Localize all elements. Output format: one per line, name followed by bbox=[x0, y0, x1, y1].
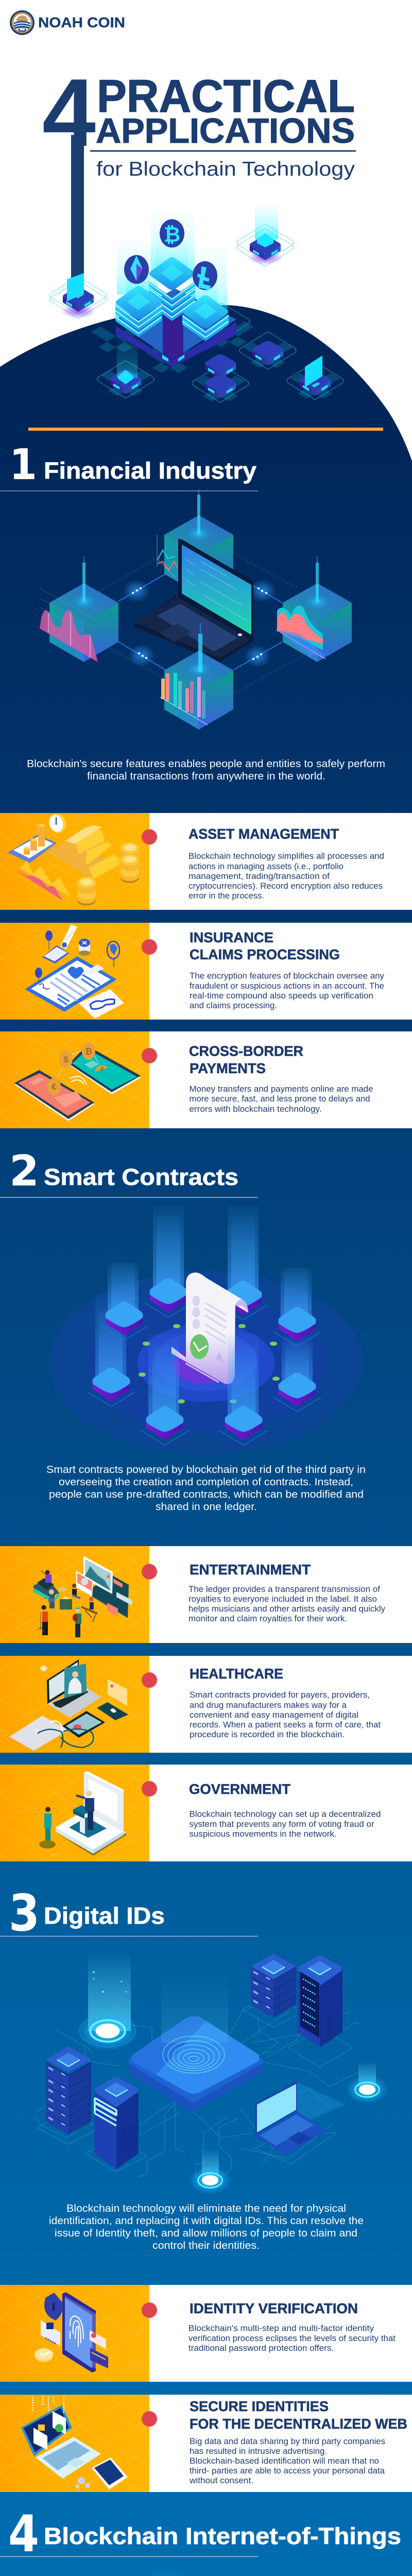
panel body text bbox=[188, 2324, 396, 2353]
panel body text bbox=[188, 852, 384, 901]
front nodes and beams bbox=[141, 1334, 267, 1445]
paragraph: smart contracts: Smart contracts powered by blockchain get rid of the third party in bbox=[46, 1464, 366, 1476]
decorative gold rule bbox=[28, 428, 383, 431]
panel heading bbox=[190, 929, 340, 962]
section heading: 3 Digital IDs: 3 bbox=[9, 1884, 40, 1943]
panel body text: convenient and easy management of digital bbox=[190, 1710, 358, 1720]
section heading: 1 Financial Industry: 1 bbox=[9, 440, 37, 489]
left cube with pink area chart bbox=[39, 556, 118, 662]
illustration: laptop with locks and phone bbox=[21, 2396, 128, 2489]
illustration: hero blockchain platform with coins and nodes bbox=[50, 204, 344, 402]
illustration: gold bars, coins, tablet chart bbox=[8, 811, 139, 906]
paragraph: digital IDs: issue of Identity theft, and allow millions of people to claim and bbox=[55, 2227, 357, 2239]
panel body text bbox=[190, 1084, 373, 1114]
panel body text: errors with blockchain technology. bbox=[190, 1105, 321, 1114]
illustration: two phones exchanging coins bbox=[14, 1042, 141, 1121]
title bbox=[42, 59, 356, 279]
panel: entertainment bbox=[0, 1546, 412, 1643]
laptop bbox=[133, 539, 253, 663]
laptop with fingerprint reader screen bbox=[255, 2081, 345, 2155]
panel: secure identities bbox=[0, 2395, 412, 2492]
panel heading: GOVERNMENT bbox=[189, 1781, 290, 1797]
section heading: 3 Digital IDs: Digital IDs bbox=[44, 1903, 165, 1929]
panel: healthcare bbox=[0, 1656, 412, 1753]
section heading: 4 Blockchain Internet-of-Things: Blockchain Internet-of-Things bbox=[44, 2523, 401, 2549]
paragraph: digital IDs: control their identities. bbox=[152, 2240, 260, 2251]
panel: asset management bbox=[0, 811, 412, 910]
panel body text bbox=[190, 1690, 381, 1739]
marker dot bbox=[142, 1672, 157, 1688]
panel body text bbox=[190, 972, 385, 1010]
marker dot bbox=[142, 2302, 157, 2318]
title: for Blockchain Technology bbox=[96, 158, 355, 180]
panel heading: CROSS-BORDER bbox=[189, 1043, 303, 1059]
panel heading: INSURANCE bbox=[190, 929, 273, 945]
panel body text: actions in managing assets (i.e., portfolio bbox=[188, 862, 344, 871]
panel heading: PAYMENTS bbox=[190, 1060, 266, 1076]
panel body text: helps musicians and other artists easily and quickly bbox=[188, 1604, 386, 1614]
top cube with line chart bbox=[157, 489, 233, 594]
paragraph: smart contracts: shared in one ledger. bbox=[156, 1501, 257, 1513]
contract document bbox=[171, 1273, 248, 1384]
panel body text: Blockchain technology can set up a decentralized bbox=[190, 1809, 381, 1819]
paragraph: digital IDs: Blockchain technology will eliminate the need for physical bbox=[66, 2202, 346, 2214]
illustration: fingerprint chip, servers, laptop bbox=[36, 1951, 388, 2194]
panel: government bbox=[0, 1765, 412, 1861]
marker dot bbox=[142, 2411, 157, 2427]
panel body text: The ledger provides a transparent transmission of bbox=[188, 1585, 380, 1594]
marker dot bbox=[142, 1781, 157, 1797]
panel body text: Blockchain's multi-step and multi-factor identity bbox=[188, 2324, 374, 2333]
server racks back bbox=[251, 1954, 342, 2047]
panel body text: fraudulent or suspicious actions in an account. The bbox=[190, 981, 384, 991]
right cube with pink and teal area chart bbox=[276, 556, 352, 662]
illustration: two phones exchanging coins: ₿ bbox=[85, 1046, 92, 1056]
title: APPLICATIONS bbox=[96, 111, 355, 150]
panel body text: more secure, fast, and less prone to delays and bbox=[190, 1094, 370, 1104]
coin stacks bbox=[115, 257, 229, 341]
logo: Noah Coin header: NOAH COIN bbox=[38, 14, 125, 30]
section heading: 2 Smart Contracts: 2 bbox=[9, 1147, 39, 1196]
panel body text: cryptocurrencies). Record encryption also reduces bbox=[188, 882, 383, 891]
green link dots bbox=[139, 1324, 280, 1403]
panel body text: Blockchain technology simplifies all processes and bbox=[188, 852, 384, 861]
panel body text: has resulted in intrusive advertising. bbox=[190, 2447, 327, 2456]
panel heading: HEALTHCARE bbox=[190, 1666, 283, 1682]
illustration: IoT server city bbox=[31, 2571, 381, 2576]
panel heading: CLAIMS PROCESSING bbox=[190, 946, 340, 962]
server platforms bbox=[37, 1994, 353, 2172]
panel body text: and drug manufacturers makes way for a bbox=[190, 1701, 347, 1710]
illustration: smart contract with ring of nodes bbox=[49, 1205, 363, 1454]
paragraph: smart contracts bbox=[46, 1464, 366, 1513]
panel body text: royalties to everyone included in the label. It also bbox=[188, 1595, 377, 1604]
panel body text bbox=[188, 1585, 386, 1623]
panel body text: error in the process. bbox=[188, 891, 264, 901]
platform bbox=[116, 289, 236, 367]
panel: identity verification bbox=[0, 2285, 412, 2382]
illustration: two phones exchanging coins: ¥ bbox=[100, 1065, 104, 1073]
paragraph: digital IDs bbox=[49, 2202, 364, 2251]
panel body text: records. When a patient seeks a form of care, that bbox=[190, 1720, 381, 1730]
paragraph: smart contracts: people can use pre-drafted contracts, which can be modified and bbox=[49, 1488, 364, 1500]
paragraph: financial industry bbox=[27, 758, 385, 782]
circuit lines bbox=[36, 1989, 363, 2184]
panel heading: ENTERTAINMENT bbox=[190, 1562, 311, 1578]
paragraph: digital IDs: identification, and replacing it with digital IDs. This can resolve the bbox=[49, 2215, 364, 2227]
panel body text: The encryption features of blockchain oversee any bbox=[190, 972, 385, 981]
panel heading: IDENTITY VERIFICATION bbox=[190, 2300, 358, 2316]
panel body text: Big data and data sharing by third party companies bbox=[190, 2437, 385, 2446]
front cube with bar chart bbox=[160, 623, 233, 730]
coin icons: bitcoin, ethereum, litecoin: ₿ bbox=[164, 224, 180, 246]
section heading: 2 Smart Contracts: Smart Contracts bbox=[44, 1164, 238, 1190]
beams behind coin stacks bbox=[117, 209, 227, 310]
panel body text: third- parties are able to access your personal data bbox=[190, 2466, 385, 2476]
panel body text: procedure is recorded in the blockchain. bbox=[190, 1730, 345, 1739]
illustration: laptop linked to four data cubes bbox=[39, 489, 352, 730]
panel body text: monitor and claim royalties for their work. bbox=[188, 1614, 347, 1623]
paragraph: smart contracts: overseeing the creation and completion of contracts. Instead, bbox=[59, 1476, 353, 1488]
panel heading bbox=[190, 2398, 407, 2432]
illustration: phone with fingerprint and shield bbox=[35, 2292, 108, 2372]
marker dot bbox=[142, 939, 157, 955]
panel body text: management, trading/transaction of bbox=[188, 872, 330, 881]
illustration: two phones exchanging coins: € bbox=[52, 1082, 57, 1092]
server racks front bbox=[46, 2046, 139, 2169]
section heading: 4 Blockchain Internet-of-Things: 4 bbox=[8, 2505, 39, 2564]
small glow beacons bbox=[189, 2061, 388, 2194]
title: 4 bbox=[42, 59, 96, 166]
outlined pads and small nodes bbox=[50, 204, 344, 402]
top beams bbox=[93, 2571, 277, 2576]
panel body text: real-time compound also speeds up verification bbox=[190, 991, 373, 1001]
panel heading: ASSET MANAGEMENT bbox=[188, 826, 339, 842]
marker dot bbox=[142, 1564, 157, 1580]
panel body text: without consent. bbox=[189, 2476, 253, 2485]
back nodes and beams bbox=[88, 1205, 321, 1412]
panel body text bbox=[190, 1809, 381, 1839]
title: PRACTICAL bbox=[97, 70, 355, 122]
panel body text: suspicious movements in the network. bbox=[190, 1829, 337, 1839]
marker dot bbox=[142, 829, 157, 845]
marker dot bbox=[142, 1048, 157, 1063]
panel body text bbox=[189, 2437, 385, 2485]
section heading: 1 Financial Industry bbox=[0, 440, 258, 492]
illustration: telehealth laptop, tablet, stethoscope bbox=[9, 1659, 128, 1751]
panel body text: verification process eclipses the levels of security that bbox=[188, 2334, 396, 2343]
paragraph: financial industry: financial transactions from anywhere in the world. bbox=[87, 770, 325, 782]
coin icons: bitcoin, ethereum, litecoin bbox=[124, 219, 217, 290]
section heading: 2 Smart Contracts bbox=[0, 1147, 258, 1198]
illustration: band with media screens bbox=[33, 1556, 132, 1637]
panel heading: SECURE IDENTITIES bbox=[190, 2398, 329, 2414]
panel body text: Money transfers and payments online are made bbox=[190, 1084, 373, 1094]
connector glow dots bbox=[123, 580, 276, 668]
concentric glow ellipses bbox=[49, 1272, 363, 1454]
panel: insurance claims processing bbox=[0, 923, 412, 1020]
panel heading: FOR THE DECENTRALIZED WEB bbox=[190, 2416, 407, 2432]
section heading: 4 Blockchain Internet-of-Things bbox=[0, 2505, 401, 2564]
connector lines bbox=[100, 553, 302, 692]
logo: Noah Coin header bbox=[10, 10, 125, 35]
panel body text: and claims processing. bbox=[190, 1001, 277, 1010]
illustration: clipboard, calculator, glasses bbox=[26, 924, 124, 1019]
fingerprint chip bbox=[129, 1973, 263, 2111]
section heading: 3 Digital IDs bbox=[0, 1884, 258, 1943]
panel heading bbox=[189, 1043, 303, 1076]
panel body text: Smart contracts provided for payers, providers, bbox=[190, 1690, 370, 1700]
illustration: two phones exchanging coins: $ bbox=[63, 1055, 68, 1064]
panel body text: Blockchain-based identification will mean that no bbox=[190, 2456, 379, 2466]
top glow beacon bbox=[77, 1951, 139, 2051]
panel body text: traditional password protection offers. bbox=[188, 2344, 334, 2353]
illustration: speaker at podium and reporter bbox=[39, 1771, 126, 1856]
panel: cross-border payments bbox=[0, 1031, 412, 1128]
paragraph: financial industry: Blockchain's secure features enables people and entities to safely perform bbox=[27, 758, 385, 770]
panel body text: system that prevents any form of voting fraud or bbox=[190, 1820, 374, 1829]
section heading: 1 Financial Industry: Financial Industry bbox=[44, 457, 256, 484]
